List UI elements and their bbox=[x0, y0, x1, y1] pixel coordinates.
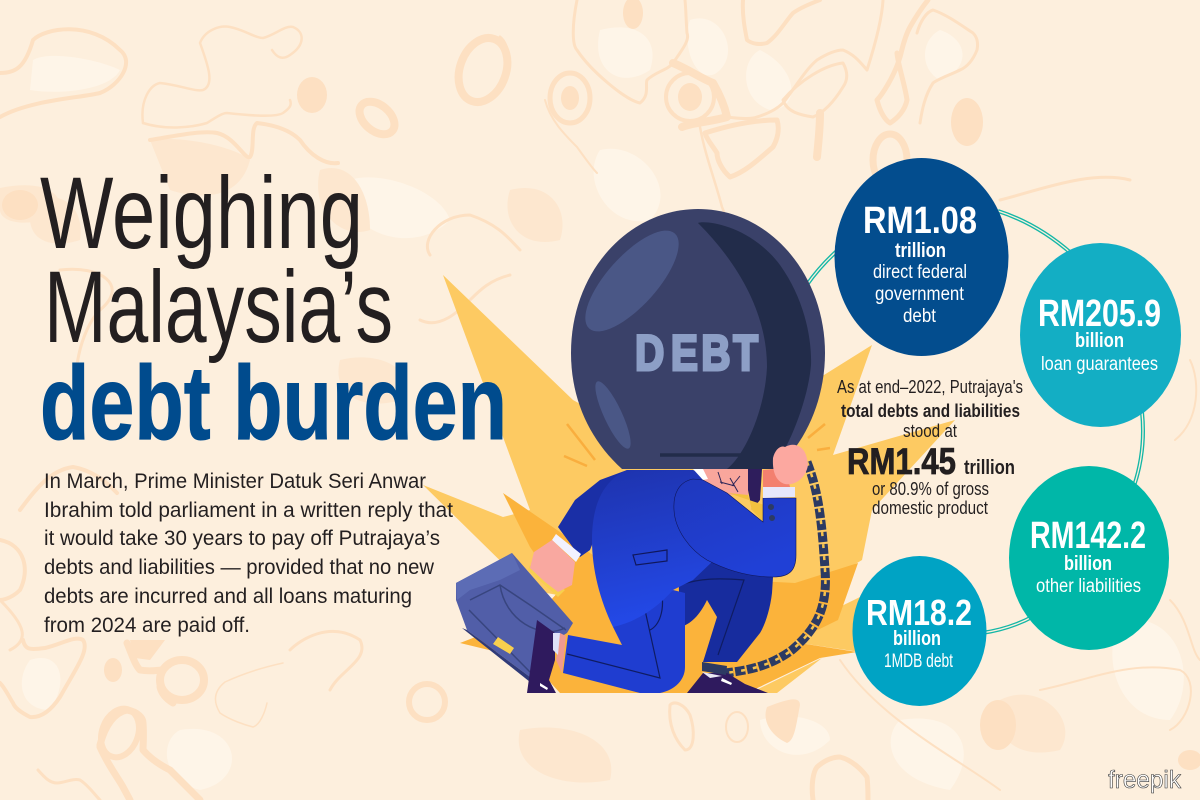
explosion burst behind figure bbox=[423, 275, 955, 693]
circle: direct federal government debt: RM1.08 bbox=[863, 200, 977, 242]
circle: direct federal government debt: government bbox=[875, 284, 965, 305]
title: debt burden bbox=[40, 345, 507, 462]
circle: other liabilities: billion bbox=[1064, 553, 1112, 575]
spark lines around ball bbox=[564, 424, 830, 466]
circle: other liabilities bbox=[1009, 466, 1169, 650]
central total callout: RM1.45 bbox=[847, 441, 956, 482]
circle: direct federal government debt bbox=[834, 158, 1008, 356]
circle: 1MDB debt: billion bbox=[893, 628, 941, 650]
circle: direct federal government debt: direct federal bbox=[873, 262, 967, 283]
ring connecting the circles bbox=[806, 211, 1143, 633]
icon: briefcase bbox=[456, 553, 573, 682]
icon: chain bbox=[725, 462, 825, 673]
intro paragraph: In March, Prime Minister Datuk Seri Anwar bbox=[44, 470, 426, 493]
circle: loan guarantees: RM205.9 bbox=[1038, 293, 1161, 335]
intro paragraph: from 2024 are paid off. bbox=[44, 614, 250, 637]
icon: right shoe and shackle bbox=[687, 662, 768, 693]
back leg bbox=[678, 555, 773, 662]
fist gripping ball bbox=[773, 445, 808, 484]
circle: direct federal government debt: trillion bbox=[895, 240, 946, 262]
circle: loan guarantees: loan guarantees bbox=[1041, 354, 1158, 375]
front leg bbox=[563, 590, 685, 693]
back arm bbox=[558, 470, 627, 557]
head and neck bbox=[693, 469, 764, 522]
intro paragraph: debts are incurred and all loans maturing bbox=[44, 585, 412, 608]
front arm bbox=[674, 479, 796, 577]
circle: other liabilities: RM142.2 bbox=[1030, 515, 1146, 557]
title: Weighing bbox=[40, 156, 363, 270]
pocket bbox=[633, 550, 667, 565]
central total callout bbox=[837, 377, 1023, 518]
central total callout: trillion bbox=[964, 457, 1015, 479]
jacket bbox=[592, 470, 735, 627]
intro paragraph: debts and liabilities — provided that no new bbox=[44, 556, 435, 579]
figure: kneeling man in blue suit bbox=[456, 209, 825, 693]
circle: 1MDB debt: 1MDB debt bbox=[884, 651, 954, 672]
central total callout: As at end–2022, Putrajaya's bbox=[837, 377, 1023, 397]
title bbox=[40, 156, 507, 462]
circle: other liabilities: other liabilities bbox=[1036, 576, 1141, 597]
circle: loan guarantees: billion bbox=[1075, 330, 1124, 352]
hand on briefcase bbox=[530, 540, 575, 592]
ball label: DEBT bbox=[635, 325, 758, 381]
central total callout: stood at bbox=[903, 421, 957, 441]
cuff right bbox=[763, 487, 795, 498]
circle: loan guarantees bbox=[1020, 243, 1181, 427]
central total callout: domestic product bbox=[872, 498, 988, 518]
circle: direct federal government debt: debt bbox=[903, 306, 937, 327]
circle: 1MDB debt bbox=[852, 556, 986, 706]
central total callout: or 80.9% of gross bbox=[872, 479, 989, 499]
circle: 1MDB debt: RM18.2 bbox=[866, 592, 972, 633]
icon: left shoe and sock bbox=[527, 620, 566, 693]
cuff left bbox=[552, 534, 581, 562]
central total callout: total debts and liabilities bbox=[841, 401, 1020, 421]
freepik credit: freepik bbox=[1108, 766, 1181, 794]
intro paragraph: it would take 30 years to pay off Putrajaya’s bbox=[44, 527, 440, 550]
wrecking ball bbox=[571, 209, 825, 469]
intro paragraph: Ibrahim told parliament in a written reply that bbox=[44, 499, 453, 522]
intro paragraph bbox=[44, 470, 453, 637]
title: Malaysia’s bbox=[44, 250, 393, 364]
